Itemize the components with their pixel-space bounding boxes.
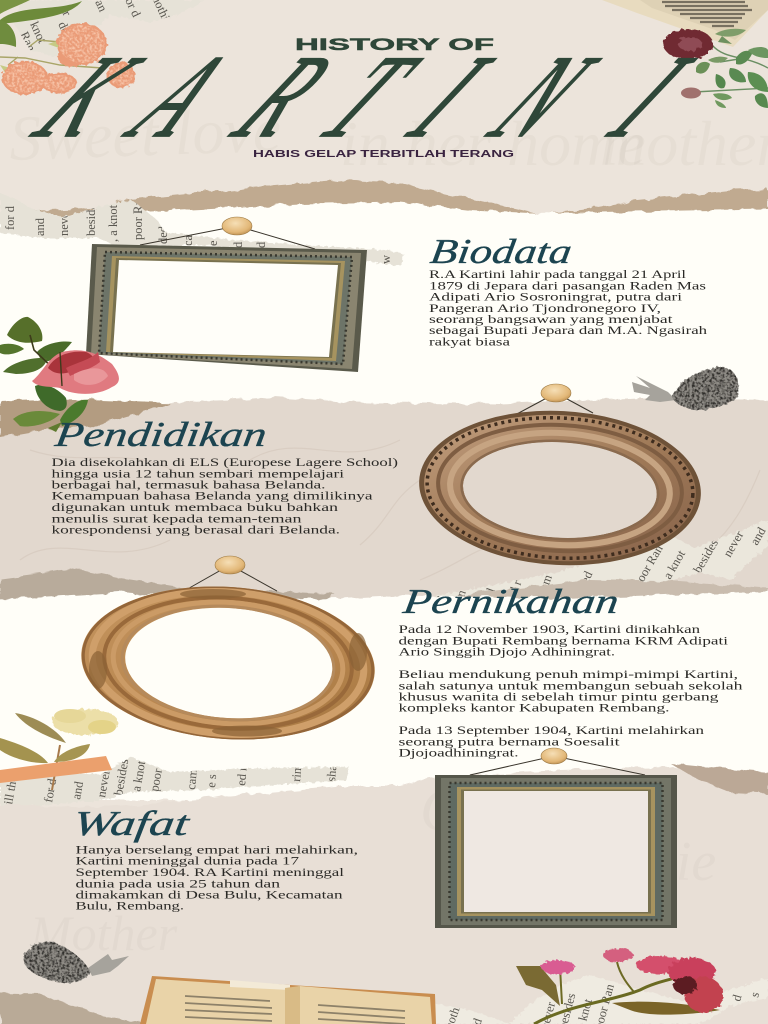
text: wafat: dimakamkan di Desa Bulu, Kecamatan (76, 889, 343, 901)
hanging wire (515, 393, 593, 415)
newspaper strip lower left: a knot (129, 759, 148, 793)
newspaper strip right: ed r (505, 578, 525, 601)
newspaper strip lower left: rim (289, 763, 305, 782)
newspaper strip lower left: cam (184, 768, 200, 790)
text: pendidikan: korespondensi yang berasal dari Belanda. (52, 524, 340, 536)
newspaper strip right: poor Ran (630, 542, 666, 590)
newspaper strip lower left: for d (41, 777, 59, 804)
panel: wafat frame (435, 748, 677, 928)
text: pernikahan: Pada 12 November 1903, Kartini dinikahkan (398, 624, 701, 636)
ornaments (89, 589, 367, 736)
text: pernikahan: salah satunya untuk membangun sebuah sekolah (398, 680, 743, 692)
nail (222, 217, 252, 235)
newspaper strip lower left: sha (324, 764, 339, 782)
nail (541, 748, 567, 764)
newspaper strip behind first frame: never (57, 207, 71, 236)
illustration: open book top-right (602, 0, 768, 47)
newspaper strip top-left: Ran (17, 29, 39, 54)
text: biodata: sebagai Bupati Jepara dan M.A. Ngasirah (429, 325, 708, 337)
white torn band 1 (0, 202, 768, 410)
white torn band 2 (0, 592, 768, 800)
newspaper strip lower left: and (69, 780, 86, 801)
illustration: dried cream flower and tape (0, 709, 118, 790)
newspaper strip lower left: ed r (234, 765, 250, 786)
newspaper strip behind first frame: e s (206, 232, 220, 246)
text: pernikahan: Beliau mendukung penuh mimpi-mimpi Kartini, (398, 669, 738, 681)
illustration: butterfly right (632, 367, 738, 410)
newspaper strip behind first frame: , a knot (106, 204, 120, 242)
illustration: pink rose left (0, 317, 119, 432)
newspaper strip right: ded (575, 568, 596, 591)
newspaper strip right: and (747, 524, 768, 548)
text: wafat: Bulu, Rembang. (76, 901, 184, 913)
newspaper strip right: e d (480, 586, 498, 605)
newspaper strip lower left (0, 756, 349, 804)
newspaper strip lower right: s (747, 990, 762, 999)
text: pendidikan: digunakan untuk membaca buku bahkan (52, 502, 339, 514)
newspaper strip lower left: e s (204, 773, 219, 788)
panel: pendidikan frame (415, 384, 705, 572)
text: wafat: dunia pada usia 25 tahun dan (76, 878, 281, 890)
subtitle: HABIS GELAP TERBITLAH TERANG (253, 149, 514, 160)
newspaper strip right: rim (450, 588, 469, 609)
illustration: dark rose and leaves top-right (663, 29, 768, 108)
illustration: butterfly bottom-left (24, 942, 129, 983)
torn brown paper strip top (0, 180, 768, 225)
panel: pernikahan frame (76, 556, 380, 749)
newspaper strip right (436, 520, 768, 598)
heading: wafat: Wafat (71, 804, 193, 843)
background: parchment bottom: Queen of (420, 777, 646, 843)
text: biodata: Adipati Ario Sosroningrat, putra dari (429, 292, 682, 304)
text: pendidikan: berbagai hal, termasuk bahasa Belanda. (52, 480, 326, 492)
text: pernikahan: khusus wanita di sebelah timur pintu gerbang (398, 691, 719, 703)
text: pendidikan (52, 457, 398, 536)
text: wafat: Hanya berselang empat hari melahirkan, (76, 845, 358, 857)
text: biodata: rakyat biasa (429, 336, 510, 348)
text: biodata: seorang bangsawan yang menjabat (429, 314, 674, 326)
newspaper strip right: cam (535, 572, 555, 597)
newspaper strip behind first frame (0, 193, 404, 266)
nail (541, 384, 571, 402)
torn brown paper left, mid (0, 399, 170, 437)
newspaper strip right: a knot (660, 547, 688, 582)
newspaper strip lower right: d (729, 992, 745, 1003)
newspaper strip behind first frame: d (254, 241, 268, 248)
newspaper strip top-left: er (57, 3, 74, 19)
illustration: pink flowers bottom-right (516, 948, 723, 1024)
text: pendidikan: hingga usia 12 tahun sembari mempelajari (52, 468, 344, 480)
beige torn band 2 (0, 397, 768, 610)
taupe torn strips, section 3 top (0, 568, 768, 606)
title: history of: HISTORY OF (295, 35, 494, 54)
hanging wire (470, 756, 645, 775)
text: pernikahan: Pada 13 September 1904, Kartini melahirkan (398, 725, 705, 737)
background: parchment bottom (0, 767, 768, 1024)
text: pernikahan: seorang putra bernama Soesalit (398, 736, 621, 748)
hanging wire (184, 565, 277, 591)
newspaper strip behind first frame: besides (84, 199, 98, 236)
newspaper strip lower left: ill the (1, 774, 20, 806)
text: pendidikan: menulis surat kepada teman-teman (52, 513, 302, 525)
text: biodata: Pangeran Ario Tjondronegoro IV, (429, 303, 661, 315)
text: pernikahan: dengan Bupati Rembang bernama KRM Adipati (398, 635, 728, 647)
newspaper strip behind first frame: poor Ran (131, 193, 145, 240)
background: parchment top (0, 0, 768, 240)
text: biodata: 1879 di Jepara dari pasangan Raden Mas (429, 280, 706, 292)
newspaper strip top-left: knot (27, 19, 50, 46)
illustration: orange flowers top-left (0, 0, 135, 95)
newspaper strip behind first frame: ded (156, 225, 170, 244)
text: pernikahan (398, 624, 743, 760)
text: pernikahan: kompleks kantor Kabupaten Rembang. (398, 702, 670, 714)
newspaper strip right: besides (690, 537, 721, 576)
title: kartini: KARTINI (6, 32, 719, 162)
newspaper strip right: never (720, 528, 747, 560)
newspaper strip behind first frame: for d (3, 205, 17, 230)
text: wafat: September 1904. RA Kartini meninggal (76, 867, 344, 879)
heading: pernikahan: Pernikahan (400, 582, 621, 621)
text: pernikahan: Ario Singgih Djojo Adhiningrat. (398, 647, 615, 659)
text: pendidikan: Kemampuan bahasa Belanda yang dimilikinya (52, 491, 373, 503)
text: Sweet love (8, 94, 282, 174)
text: wafat (76, 845, 358, 913)
newspaper strip lower right (430, 975, 768, 1024)
newspaper strip lower left: besides (111, 758, 131, 797)
text: in her home (340, 108, 646, 179)
text: pernikahan: Djojoadhiningrat. (398, 748, 519, 760)
newspaper strip behind first frame: w (379, 255, 393, 264)
background: parchment bottom: Mother (29, 905, 178, 961)
newspaper strip lower left: never (94, 768, 113, 799)
text: pendidikan: Dia disekolahkan di ELS (Europese Lagere School) (52, 457, 398, 469)
newspaper strip right: sha (426, 592, 445, 613)
illustration: open book bottom (140, 976, 436, 1024)
nail (215, 556, 245, 574)
torn taupe strip right and bottom-left (0, 763, 768, 1024)
newspaper strip behind first frame: d r (231, 234, 245, 248)
heading: biodata: Biodata (428, 232, 574, 271)
panel: biodata frame (86, 217, 367, 372)
background: parchment bottom: dear Annie (470, 831, 716, 893)
newspaper strip behind first frame: and (33, 217, 47, 236)
newspaper strip top-left: de (55, 19, 73, 36)
newspaper strip behind first frame: cam (181, 225, 195, 246)
text: biodata (429, 269, 708, 348)
text: biodata: R.A Kartini lahir pada tanggal 21 April (429, 269, 686, 281)
text: wafat: Kartini meninggal dunia pada 17 (76, 856, 300, 868)
newspaper strip top-left (20, 0, 170, 50)
hanging wire (140, 226, 315, 249)
newspaper strip lower left: poor Ran (147, 744, 169, 793)
heading: pendidikan: Pendidikan (52, 415, 269, 454)
